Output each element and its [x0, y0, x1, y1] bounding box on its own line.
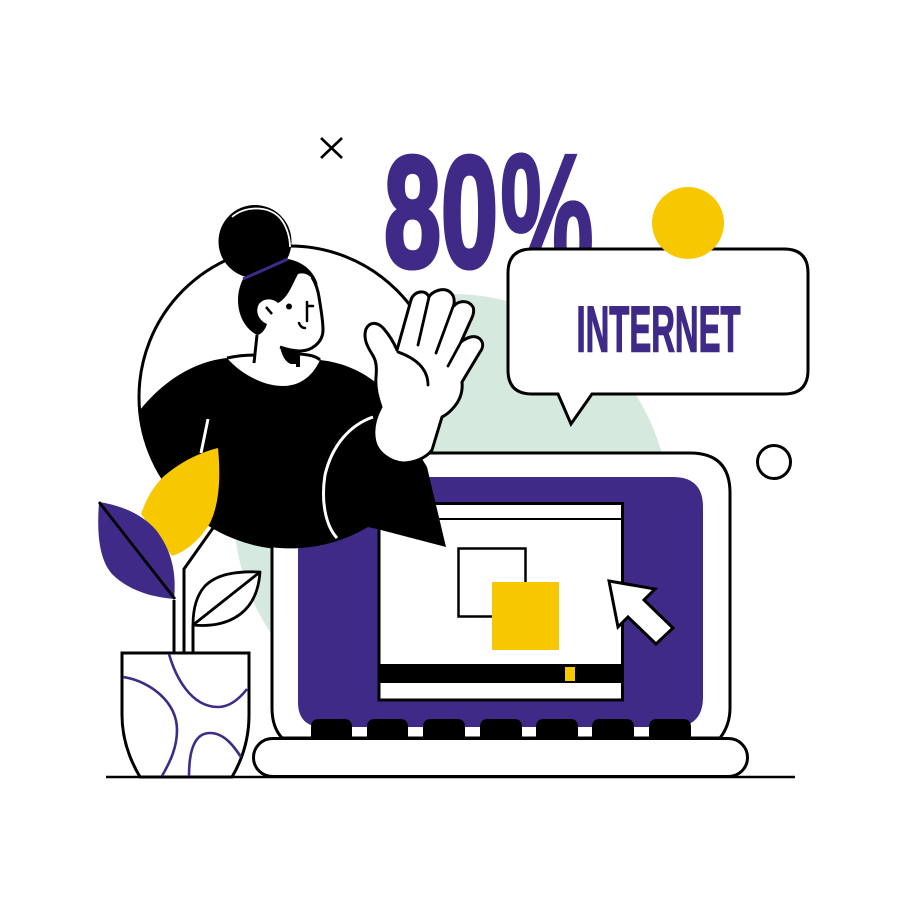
laptop [254, 453, 748, 776]
hair bun [218, 205, 292, 278]
bun highlight [232, 208, 290, 247]
small outline leaf [193, 572, 260, 625]
mouth [299, 323, 305, 328]
palm crease and finger lines [398, 297, 461, 385]
icon: small cross [321, 138, 342, 158]
white shirt folds [201, 417, 373, 538]
bubble label: INTERNET [576, 292, 740, 366]
stems [174, 528, 213, 652]
woman [140, 205, 483, 548]
nose and brow [307, 302, 313, 321]
speech bubble [508, 249, 808, 424]
laptop base [254, 738, 748, 776]
ground line [106, 776, 795, 778]
face [258, 274, 323, 351]
keyboard keys [311, 719, 691, 738]
black shirt [140, 358, 446, 548]
yellow leaf [141, 448, 219, 556]
raised hand [365, 290, 483, 463]
big number: 80%: % [500, 117, 594, 318]
purple leaf midrib [99, 502, 175, 599]
hair [238, 259, 318, 335]
yellow circle [652, 187, 724, 259]
face outline [280, 277, 323, 351]
icon: mouse cursor [609, 581, 673, 644]
shirt collar edge [227, 354, 320, 360]
pot pattern [123, 654, 247, 776]
eye [286, 304, 292, 310]
laptop lid [272, 453, 730, 738]
pale green background circle [234, 294, 670, 730]
avatar circle [139, 246, 441, 548]
hair band [243, 259, 288, 279]
small outline circle [758, 446, 790, 478]
neck line [254, 335, 257, 363]
plant [98, 448, 260, 777]
laptop screen [298, 477, 703, 727]
browser window [379, 504, 622, 700]
chin shadow [280, 347, 300, 367]
ear tick [266, 307, 272, 314]
big number: 80%: 80 [384, 124, 498, 300]
purple leaf [98, 502, 175, 599]
flower pot [122, 653, 249, 777]
